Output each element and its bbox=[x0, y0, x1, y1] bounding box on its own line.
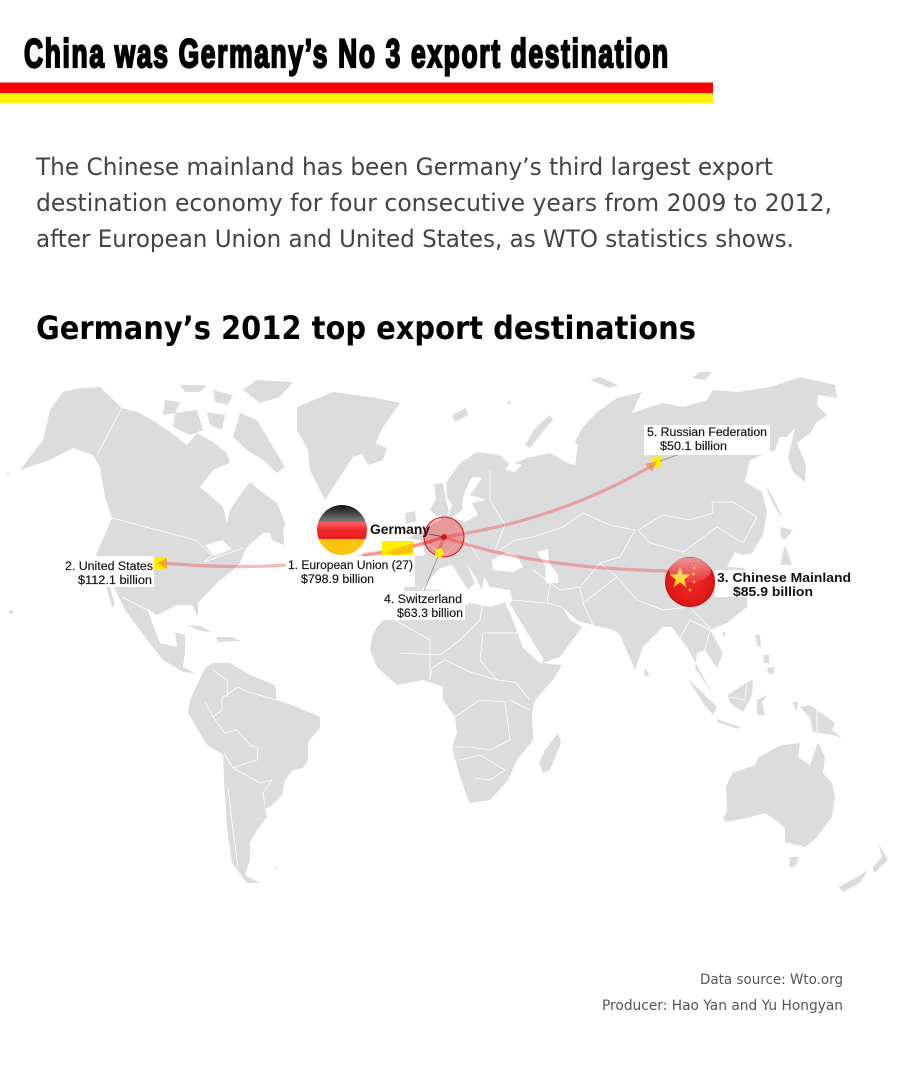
trade route arcs bbox=[163, 465, 667, 571]
yellow marker: European Union bbox=[382, 541, 413, 555]
label: Germany: Germany bbox=[370, 521, 430, 537]
Borneo bbox=[728, 680, 753, 712]
New Zealand bbox=[873, 843, 888, 873]
Sri Lanka bbox=[644, 668, 650, 677]
Sulawesi bbox=[757, 695, 768, 715]
arc to Switzerland bbox=[438, 537, 444, 553]
label: Switzerland bbox=[383, 591, 465, 620]
Germany highlight circle bbox=[424, 517, 464, 591]
label: Chinese Mainland: 3. Chinese Mainland bbox=[717, 570, 851, 585]
small islands bbox=[7, 472, 9, 474]
arc to Chinese Mainland bbox=[444, 537, 667, 571]
Sumatra bbox=[688, 679, 717, 715]
Sakhalin and Japan bbox=[765, 485, 783, 518]
label: Russian Federation bbox=[644, 425, 770, 455]
icon: Germany flag globe bbox=[317, 505, 367, 555]
data source credits bbox=[602, 972, 843, 1014]
intro text block bbox=[35, 153, 832, 253]
label: Russian Federation: $50.1 billion bbox=[660, 441, 727, 453]
Taiwan and Hainan bbox=[722, 632, 726, 637]
label: Russian Federation: 5. Russian Federation bbox=[647, 427, 767, 439]
label: Chinese Mainland: $85.9 billion bbox=[733, 584, 813, 599]
intro text block: destination economy for four consecutive years from 2009 to 2012, bbox=[36, 189, 832, 217]
Arctic islands bbox=[233, 413, 285, 473]
arc to Russian Federation bbox=[444, 465, 653, 537]
Baja California bbox=[105, 583, 115, 607]
Arctic Eurasian islands bbox=[452, 408, 468, 422]
North America bbox=[20, 387, 285, 674]
label: Switzerland: 4. Switzerland bbox=[384, 594, 462, 606]
South America bbox=[188, 663, 320, 883]
Iceland, Ireland, UK bbox=[360, 442, 387, 465]
landmasses bbox=[7, 372, 888, 892]
borders bbox=[97, 408, 817, 867]
label: Chinese Mainland bbox=[715, 570, 852, 599]
Australia bbox=[723, 742, 835, 847]
Eurasia bbox=[402, 377, 837, 693]
icon: China flag globe bbox=[665, 557, 715, 607]
yellow marker and arrow: United States bbox=[154, 557, 167, 569]
data source credits: Data source: Wto.org bbox=[700, 972, 843, 988]
title: China was Germany’s No 3 export destination bbox=[24, 32, 668, 76]
Caribbean bbox=[187, 625, 212, 632]
Java bbox=[717, 719, 740, 729]
inland seas bbox=[205, 440, 578, 663]
world map bbox=[7, 372, 888, 892]
arc to United States bbox=[163, 537, 444, 567]
label: United States: $112.1 billion bbox=[78, 575, 152, 587]
intro text block: The Chinese mainland has been Germany’s third largest export bbox=[35, 153, 773, 181]
label: Switzerland: $63.3 billion bbox=[397, 608, 463, 620]
label: United States: 2. United States bbox=[65, 561, 153, 573]
yellow marker and arrow: Russian Federation bbox=[645, 454, 680, 472]
Tasmania bbox=[789, 857, 799, 867]
label: European Union: $798.9 billion bbox=[301, 574, 374, 586]
title colour bars bbox=[0, 82, 713, 103]
label: European Union bbox=[286, 556, 415, 587]
intro text block: after European Union and United States, as WTO statistics shows. bbox=[36, 225, 794, 253]
New Guinea bbox=[800, 705, 842, 738]
arc to European Union bbox=[362, 537, 444, 555]
label: European Union: 1. European Union (27) bbox=[288, 560, 413, 572]
Philippines bbox=[755, 635, 761, 648]
label: United States bbox=[63, 556, 154, 587]
Greenland bbox=[297, 392, 400, 500]
Madagascar bbox=[539, 733, 561, 773]
Africa bbox=[370, 590, 562, 803]
chart heading: Germany’s 2012 top export destinations bbox=[36, 309, 696, 347]
data source credits: Producer: Hao Yan and Yu Hongyan bbox=[602, 998, 843, 1014]
